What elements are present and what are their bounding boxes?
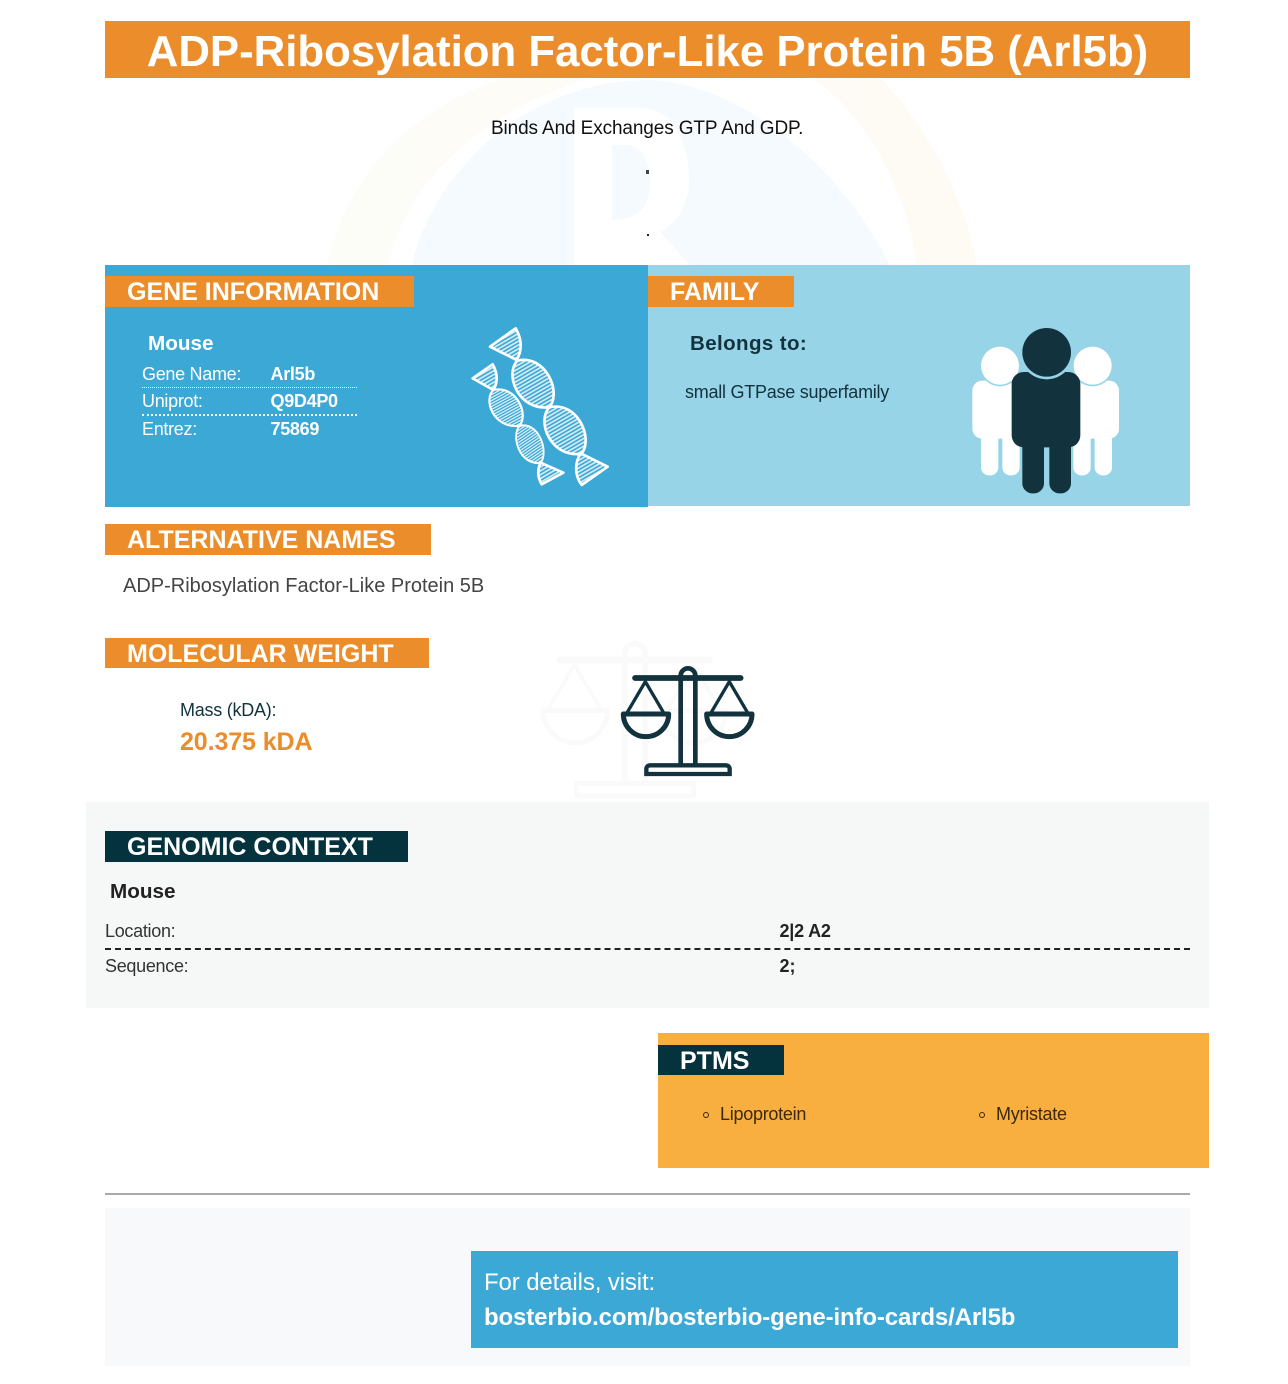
location label: Location: [105, 921, 175, 941]
heading: family [648, 276, 794, 307]
gene name label: Gene Name: [142, 364, 241, 384]
icon: people [972, 328, 1119, 494]
species label: Mouse [110, 880, 176, 903]
heading: ptms [658, 1045, 784, 1075]
watermark logo [412, 78, 977, 265]
heading: family: FAMILY [670, 278, 759, 306]
separator dot small [647, 234, 649, 236]
uniprot value: Q9D4P0 [270, 391, 338, 411]
gene name value: Arl5b [270, 364, 315, 384]
dashed divider [105, 948, 1190, 950]
alternative names text: ADP-Ribosylation Factor-Like Protein 5B [123, 575, 484, 597]
mass value: 20.375 kDA [180, 728, 312, 756]
belongs to label: Belongs to: [690, 332, 807, 355]
sequence value: 2; [780, 956, 796, 976]
divider [142, 387, 357, 388]
divider [142, 414, 357, 416]
panel: genomic context [86, 802, 1209, 1008]
icon: faint scale watermark and scale [620, 666, 754, 776]
heading: alternative names: ALTERNATIVE NAMES [127, 526, 396, 554]
ptm item: Lipoprotein [720, 1104, 806, 1124]
entrez value: 75869 [270, 419, 319, 439]
callout label: For details, visit: [484, 1269, 655, 1296]
panel: family [648, 265, 1190, 506]
heading: genomic context: GENOMIC CONTEXT [127, 833, 373, 861]
description text: Binds And Exchanges GTP And GDP. [491, 118, 803, 139]
location value: 2|2 A2 [780, 921, 831, 941]
icon: dna [471, 326, 609, 486]
title: ADP-Ribosylation Factor-Like Protein 5B (Arl5b) [147, 27, 1148, 76]
separator dot [646, 170, 649, 174]
callout: details link [471, 1251, 1178, 1348]
heading: ptms: PTMS [680, 1047, 749, 1075]
species label: Mouse [148, 332, 214, 355]
mass label: Mass (kDA): [180, 700, 276, 720]
entrez label: Entrez: [142, 419, 197, 439]
panel: footer [105, 1208, 1190, 1366]
sequence label: Sequence: [105, 956, 188, 976]
panel: ptms [658, 1033, 1209, 1168]
heading: molecular weight: MOLECULAR WEIGHT [127, 640, 394, 668]
heading: gene information: GENE INFORMATION [127, 278, 379, 306]
title banner [105, 21, 1190, 78]
bullet [979, 1112, 985, 1118]
uniprot label: Uniprot: [142, 391, 203, 411]
bullet [703, 1112, 709, 1118]
callout url: bosterbio.com/bosterbio-gene-info-cards/Arl5b [484, 1304, 1015, 1331]
panel: gene information [105, 265, 648, 507]
family value: small GTPase superfamily [685, 382, 889, 402]
ptm item: Myristate [996, 1104, 1067, 1124]
